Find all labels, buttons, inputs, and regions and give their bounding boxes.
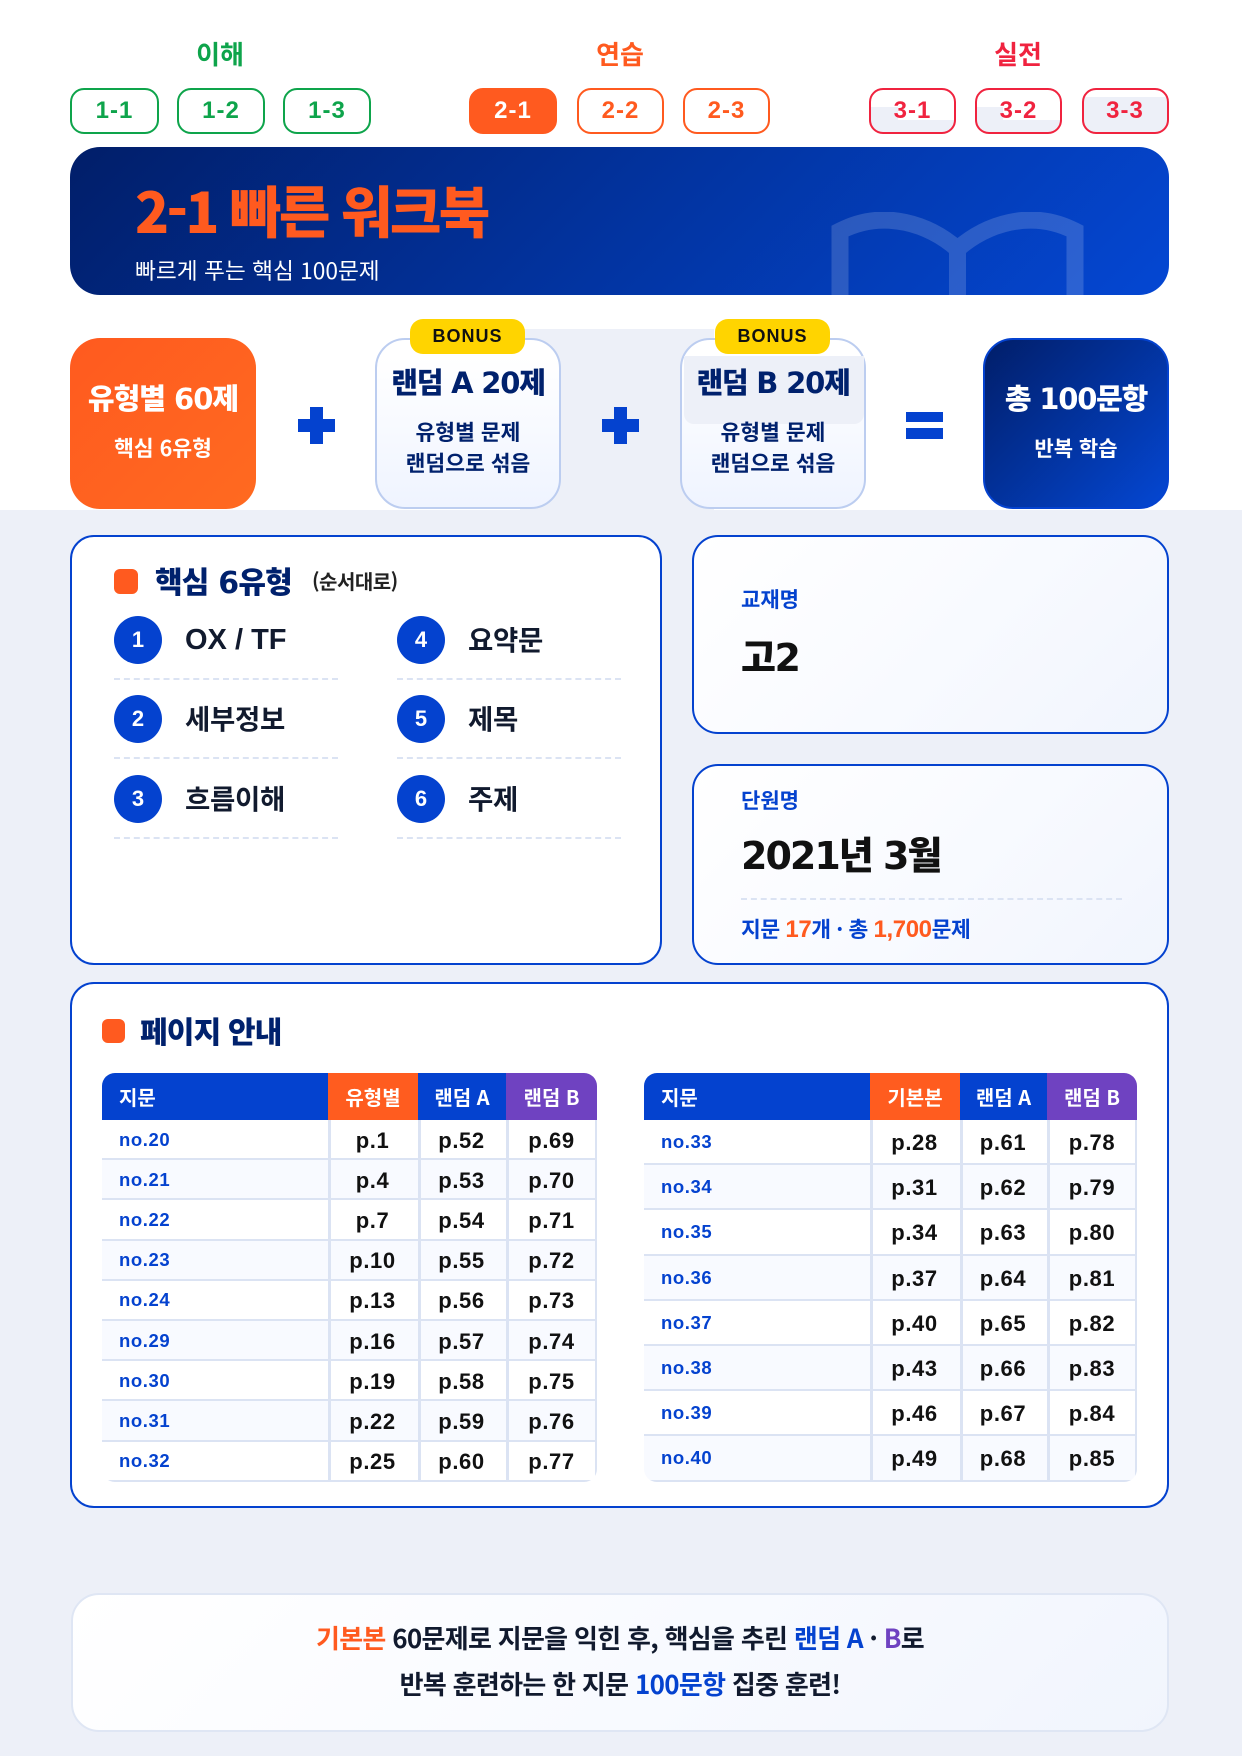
- button 1-3: 1-3: [308, 97, 346, 124]
- table: no.20–no.32: p.16: [349, 1329, 396, 1354]
- panel: 단원명: [692, 764, 1169, 965]
- table: no.20–no.32: p.58: [438, 1369, 485, 1394]
- icon: equals: [906, 412, 943, 439]
- card title: 총 100문항: [1005, 382, 1147, 416]
- table: no.20–no.32: no.22: [119, 1209, 170, 1230]
- card description: [406, 416, 530, 478]
- item 4: 요약문: [468, 618, 543, 658]
- button 3-2: [975, 88, 1062, 134]
- number 4: [397, 616, 445, 664]
- badge: BONUS B: BONUS: [737, 326, 808, 346]
- badge: BONUS A: [410, 319, 525, 354]
- table: no.20–no.32: p.22: [349, 1409, 396, 1434]
- item 2: 세부정보: [185, 697, 285, 737]
- value: 고2: [741, 636, 799, 680]
- table: no.20–no.32: no.20: [119, 1129, 170, 1150]
- table: no.20–no.32: p.69: [528, 1128, 575, 1153]
- icon: plus: [602, 407, 639, 444]
- hero subtitle: 빠르게 푸는 핵심 100문제: [135, 253, 380, 286]
- button 3-1: [869, 88, 956, 134]
- number 2: [114, 695, 162, 743]
- number 2: 2: [132, 706, 144, 731]
- table: no.20–no.32: p.56: [438, 1288, 485, 1313]
- table: no.20–no.32: no.30: [119, 1370, 170, 1391]
- table: no.33–no.40: no.34: [661, 1176, 712, 1197]
- table: no.20–no.32: no.23: [119, 1249, 170, 1270]
- table: no.33–no.40: p.65: [980, 1311, 1026, 1336]
- item 3: 흐름이해: [185, 777, 285, 817]
- item 6: 주제: [468, 777, 518, 817]
- card title: 유형별 60제: [88, 382, 238, 416]
- table: no.20–no.32: p.53: [438, 1168, 485, 1193]
- number 5: 5: [415, 706, 427, 731]
- table: no.20–no.32: p.71: [528, 1208, 575, 1233]
- table: no.33–no.40: no.35: [661, 1221, 712, 1242]
- table: no.20–no.32: no.21: [119, 1169, 170, 1190]
- table: no.20–no.32: no.31: [119, 1410, 170, 1431]
- band inside card: [684, 356, 864, 424]
- button 1-2: [177, 88, 265, 134]
- table: no.20–no.32: 랜덤 B: [523, 1082, 580, 1111]
- number 3: [114, 775, 162, 823]
- table: no.20–no.32: p.73: [528, 1288, 575, 1313]
- table: no.33–no.40: p.78: [1069, 1130, 1115, 1155]
- panel: 페이지 안내: [70, 982, 1169, 1508]
- table: no.33–no.40: p.66: [980, 1356, 1026, 1381]
- table: no.33–no.40: p.67: [980, 1401, 1026, 1426]
- table: no.33–no.40: p.82: [1069, 1311, 1115, 1336]
- heading: 이해: 이해: [196, 35, 244, 72]
- table: no.33–no.40: p.83: [1069, 1356, 1115, 1381]
- table: no.20–no.32: 랜덤 A: [434, 1082, 490, 1111]
- panel: 교재명: [692, 535, 1169, 734]
- card: 총 100문항: [983, 338, 1169, 509]
- table: no.33–no.40: 랜덤 B: [1064, 1082, 1120, 1111]
- button 1-1: [70, 88, 159, 134]
- table: no.20–no.32: p.19: [349, 1369, 396, 1394]
- card title: 랜덤 B 20제: [696, 366, 850, 400]
- button 3-3: [1082, 88, 1168, 134]
- table: no.20–no.32: no.29: [119, 1330, 170, 1351]
- table: no.33–no.40: no.33: [661, 1131, 712, 1152]
- table: no.33–no.40: p.62: [980, 1175, 1026, 1200]
- table: no.33–no.40: no.38: [661, 1357, 712, 1378]
- card: 랜덤 A 20제: [375, 338, 561, 509]
- number 6: [397, 775, 445, 823]
- table: no.33–no.40: p.37: [891, 1266, 938, 1291]
- summary text: 지문 17개 · 총 1,700문제: [741, 913, 970, 944]
- icon: plus: [298, 407, 335, 444]
- table: no.20–no.32: [102, 1073, 597, 1482]
- table: no.33–no.40: no.36: [661, 1267, 712, 1288]
- card: 유형별 60제: [70, 338, 256, 509]
- number 5: [397, 695, 445, 743]
- card subtitle: 반복 학습: [1034, 433, 1118, 463]
- table: no.33–no.40: p.28: [891, 1130, 938, 1155]
- panel heading note: (순서대로): [312, 566, 398, 595]
- number 6: 6: [415, 786, 427, 811]
- icon: open book: [832, 212, 1084, 295]
- background band behind bonus cards: [520, 329, 714, 510]
- number 1: [114, 616, 162, 664]
- badge: BONUS A: BONUS: [432, 326, 502, 346]
- card description: 랜덤으로 섞음: [711, 447, 835, 478]
- table: no.20–no.32: p.57: [438, 1329, 485, 1354]
- table: no.20–no.32: p.77: [528, 1449, 575, 1474]
- panel: 핵심 6유형: [70, 535, 662, 965]
- value: 2021년 3월: [741, 834, 940, 878]
- table: no.33–no.40: no.40: [661, 1447, 712, 1468]
- table: no.20–no.32: p.74: [528, 1329, 575, 1354]
- table: no.33–no.40: p.40: [891, 1311, 938, 1336]
- table: no.20–no.32: p.60: [438, 1449, 485, 1474]
- table: no.20–no.32: p.75: [528, 1369, 575, 1394]
- card description: 유형별 문제: [721, 416, 825, 447]
- table: no.20–no.32: 지문: [119, 1082, 156, 1111]
- callout line 2: 반복 훈련하는 한 지문 100문항 집중 훈련!: [400, 1665, 840, 1702]
- number 3: 3: [132, 786, 144, 811]
- table: no.20–no.32: p.59: [438, 1409, 485, 1434]
- number 1: 1: [132, 627, 144, 652]
- table: no.33–no.40: p.85: [1069, 1446, 1115, 1471]
- hero title: 2-1 빠른 워크북: [135, 169, 488, 250]
- table: no.33–no.40: p.49: [891, 1446, 938, 1471]
- card description: 랜덤으로 섞음: [406, 447, 530, 478]
- table: no.20–no.32: p.55: [438, 1248, 485, 1273]
- table: no.20–no.32: p.13: [349, 1288, 396, 1313]
- table: no.33–no.40: no.37: [661, 1312, 712, 1333]
- table: no.20–no.32: p.52: [438, 1128, 485, 1153]
- panel heading: 페이지 안내: [140, 1008, 282, 1052]
- table: no.20–no.32: p.1: [356, 1128, 389, 1153]
- table: no.20–no.32: p.4: [356, 1168, 389, 1193]
- table: no.33–no.40: p.79: [1069, 1175, 1115, 1200]
- table: no.33–no.40: p.80: [1069, 1220, 1115, 1245]
- panel heading: 핵심 6유형: [155, 566, 292, 601]
- card: 랜덤 B 20제: [680, 338, 866, 509]
- icon: orange square: [114, 569, 138, 594]
- hero banner: [70, 147, 1169, 295]
- table: no.33–no.40: p.84: [1069, 1401, 1115, 1426]
- item 5: 제목: [468, 697, 518, 737]
- card description: [711, 416, 835, 478]
- table: no.33–no.40: p.68: [980, 1446, 1026, 1471]
- button 3-2: 3-2: [1000, 97, 1037, 124]
- table: no.33–no.40: 지문: [661, 1082, 698, 1111]
- callout: summary: [71, 1593, 1169, 1732]
- button 2-2: [577, 88, 664, 134]
- callout line 1: 기본본 60문제로 지문을 익힌 후, 핵심을 추린 랜덤 A · B로: [316, 1619, 924, 1656]
- table: no.20–no.32: p.72: [528, 1248, 575, 1273]
- button 2-1 active: 2-1: [494, 97, 532, 124]
- table: no.33–no.40: p.63: [980, 1220, 1026, 1245]
- table: no.33–no.40: p.81: [1069, 1266, 1115, 1291]
- table: no.33–no.40: no.39: [661, 1402, 712, 1423]
- button 3-3: 3-3: [1106, 97, 1144, 124]
- table: no.20–no.32: p.25: [349, 1449, 396, 1474]
- table: no.20–no.32: no.24: [119, 1289, 170, 1310]
- button 2-2: 2-2: [602, 97, 639, 124]
- table: no.20–no.32: p.7: [356, 1208, 389, 1233]
- lower page background: [0, 510, 1242, 1756]
- table: no.33–no.40: p.34: [891, 1220, 938, 1245]
- table: no.33–no.40: p.64: [980, 1266, 1026, 1291]
- item 1: OX / TF: [185, 624, 286, 656]
- table: no.20–no.32: p.54: [438, 1208, 485, 1233]
- table: no.33–no.40: p.31: [891, 1175, 938, 1200]
- heading: 연습: 연습: [596, 35, 644, 72]
- table: no.20–no.32: p.76: [528, 1409, 575, 1434]
- table: no.33–no.40: [644, 1073, 1137, 1482]
- button 3-1: 3-1: [894, 97, 931, 124]
- card subtitle: 핵심 6유형: [114, 432, 212, 463]
- badge: BONUS B: [715, 319, 830, 354]
- table: no.33–no.40: 랜덤 A: [976, 1082, 1031, 1111]
- number 4: 4: [415, 627, 427, 652]
- button 2-3: 2-3: [708, 97, 745, 124]
- table: no.20–no.32: p.70: [528, 1168, 575, 1193]
- table: no.33–no.40: p.43: [891, 1356, 938, 1381]
- button 2-1 active: [469, 88, 557, 134]
- icon: orange square: [102, 1019, 125, 1043]
- card title: 랜덤 A 20제: [391, 366, 545, 400]
- table: no.20–no.32: no.32: [119, 1450, 170, 1471]
- label: 단원명: [741, 785, 799, 815]
- card description: 유형별 문제: [416, 416, 520, 447]
- table: no.33–no.40: p.61: [980, 1130, 1026, 1155]
- table: no.20–no.32: 유형별: [345, 1082, 401, 1111]
- table: no.33–no.40: p.46: [891, 1401, 938, 1426]
- table: no.20–no.32: p.10: [349, 1248, 396, 1273]
- heading: 실전: 실전: [994, 35, 1042, 72]
- button 1-1: 1-1: [96, 97, 133, 124]
- button 1-2: 1-2: [202, 97, 240, 124]
- label: 교재명: [741, 584, 799, 614]
- table: no.33–no.40: 기본본: [887, 1082, 943, 1111]
- button 2-3: [683, 88, 770, 134]
- button 1-3: [283, 88, 371, 134]
